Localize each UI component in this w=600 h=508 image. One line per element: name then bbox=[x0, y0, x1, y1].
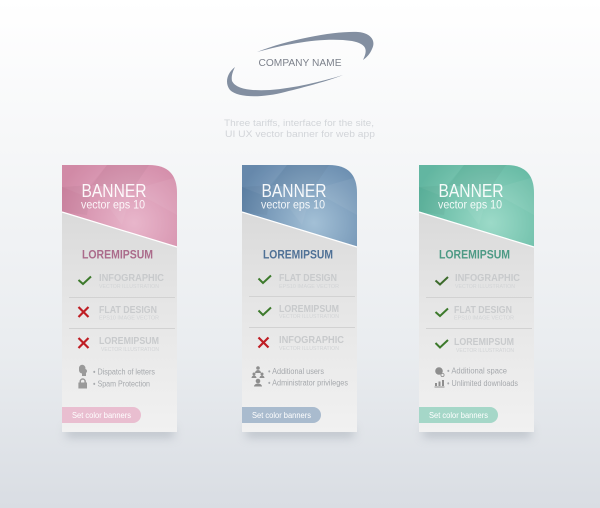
row: loremipsum: VECTOR ILLUSTRATION bbox=[456, 348, 514, 354]
heading: LOREMIPSUM bbox=[263, 248, 333, 262]
diagonal edge bbox=[242, 212, 357, 247]
card shadows bbox=[66, 428, 531, 437]
feature list: • Spam Protection bbox=[93, 380, 150, 388]
feature list: • Additional space bbox=[447, 366, 508, 376]
button bbox=[242, 407, 321, 423]
row: loremipsum bbox=[436, 337, 514, 354]
row: infographic: INFOGRAPHIC bbox=[455, 273, 520, 284]
banner title: BANNER bbox=[262, 181, 326, 201]
row: flat design: EPS10 IMAGE VECTOR bbox=[454, 316, 514, 322]
icon: finger bbox=[79, 365, 87, 376]
panel: blue tariff card bbox=[242, 165, 357, 432]
row: loremipsum: LOREMIPSUM bbox=[279, 304, 339, 315]
icon: users bbox=[252, 366, 264, 378]
feature list: • Unlimited downloads bbox=[447, 379, 518, 388]
green header banner bbox=[419, 165, 534, 247]
blue header banner bbox=[242, 165, 357, 247]
panel: pink tariff card bbox=[62, 165, 177, 432]
feature list bbox=[434, 366, 518, 388]
feature list: • Dispatch of letters bbox=[93, 368, 155, 376]
row: loremipsum bbox=[78, 336, 159, 353]
pink header banner bbox=[62, 165, 177, 247]
row: infographic: INFOGRAPHIC bbox=[99, 273, 164, 284]
row: flat design: FLAT DESIGN bbox=[454, 305, 512, 316]
feature list: • Additional users bbox=[268, 367, 324, 376]
row: infographic: INFOGRAPHIC bbox=[279, 335, 344, 346]
row: loremipsum: VECTOR ILLUSTRATION bbox=[101, 347, 159, 353]
panel: green tariff card bbox=[419, 165, 534, 432]
row: loremipsum: LOREMIPSUM bbox=[454, 337, 514, 348]
icon: administrator bbox=[254, 379, 262, 386]
banner subtitle: vector eps 10 bbox=[261, 200, 325, 212]
row: infographic: VECTOR ILLUSTRATION bbox=[99, 284, 159, 290]
feature list bbox=[78, 365, 155, 388]
subtitle: Three tariffs, interface for the site, bbox=[224, 118, 374, 129]
row: loremipsum: VECTOR ILLUSTRATION bbox=[279, 314, 339, 320]
row: flat design: FLAT DESIGN bbox=[279, 273, 337, 284]
row: flat design: EPS10 IMAGE VECTOR bbox=[99, 316, 159, 322]
row: flat design: EPS10 IMAGE VECTOR bbox=[279, 284, 339, 290]
icon: lock bbox=[78, 378, 87, 388]
row: flat design bbox=[78, 305, 159, 322]
button: Set color banners bbox=[429, 411, 488, 420]
diagonal edge bbox=[62, 212, 177, 247]
logo: company name swoosh: COMPANY NAME bbox=[258, 57, 342, 69]
icon: gear bbox=[435, 367, 444, 377]
row: infographic bbox=[78, 273, 164, 290]
banner title: BANNER bbox=[438, 181, 504, 201]
card body bbox=[242, 205, 357, 432]
icon: bar chart bbox=[434, 380, 444, 388]
card body bbox=[62, 205, 177, 432]
heading: LOREMIPSUM bbox=[82, 248, 153, 262]
button bbox=[419, 407, 498, 423]
row: infographic bbox=[258, 335, 344, 352]
row: flat design bbox=[436, 305, 514, 322]
row: infographic bbox=[436, 273, 520, 290]
banner subtitle: vector eps 10 bbox=[81, 200, 145, 212]
row: flat design: FLAT DESIGN bbox=[99, 305, 157, 316]
card body bbox=[419, 205, 534, 432]
button bbox=[62, 407, 141, 423]
banner subtitle: vector eps 10 bbox=[438, 200, 502, 212]
logo: company name swoosh bbox=[227, 32, 373, 96]
row: infographic: VECTOR ILLUSTRATION bbox=[455, 284, 515, 290]
button: Set color banners bbox=[252, 411, 311, 420]
banner title: BANNER bbox=[82, 181, 146, 201]
subtitle: UI UX vector banner for web app bbox=[225, 129, 375, 140]
row: flat design bbox=[258, 273, 339, 290]
diagonal edge bbox=[419, 212, 534, 247]
button: Set color banners bbox=[72, 411, 131, 420]
row: loremipsum: LOREMIPSUM bbox=[99, 336, 159, 347]
subtitle bbox=[224, 118, 375, 140]
heading: LOREMIPSUM bbox=[439, 248, 510, 262]
feature list: • Administrator privileges bbox=[268, 378, 348, 388]
row: infographic: VECTOR ILLUSTRATION bbox=[279, 346, 339, 352]
row: loremipsum bbox=[258, 304, 339, 320]
feature list bbox=[252, 366, 348, 388]
